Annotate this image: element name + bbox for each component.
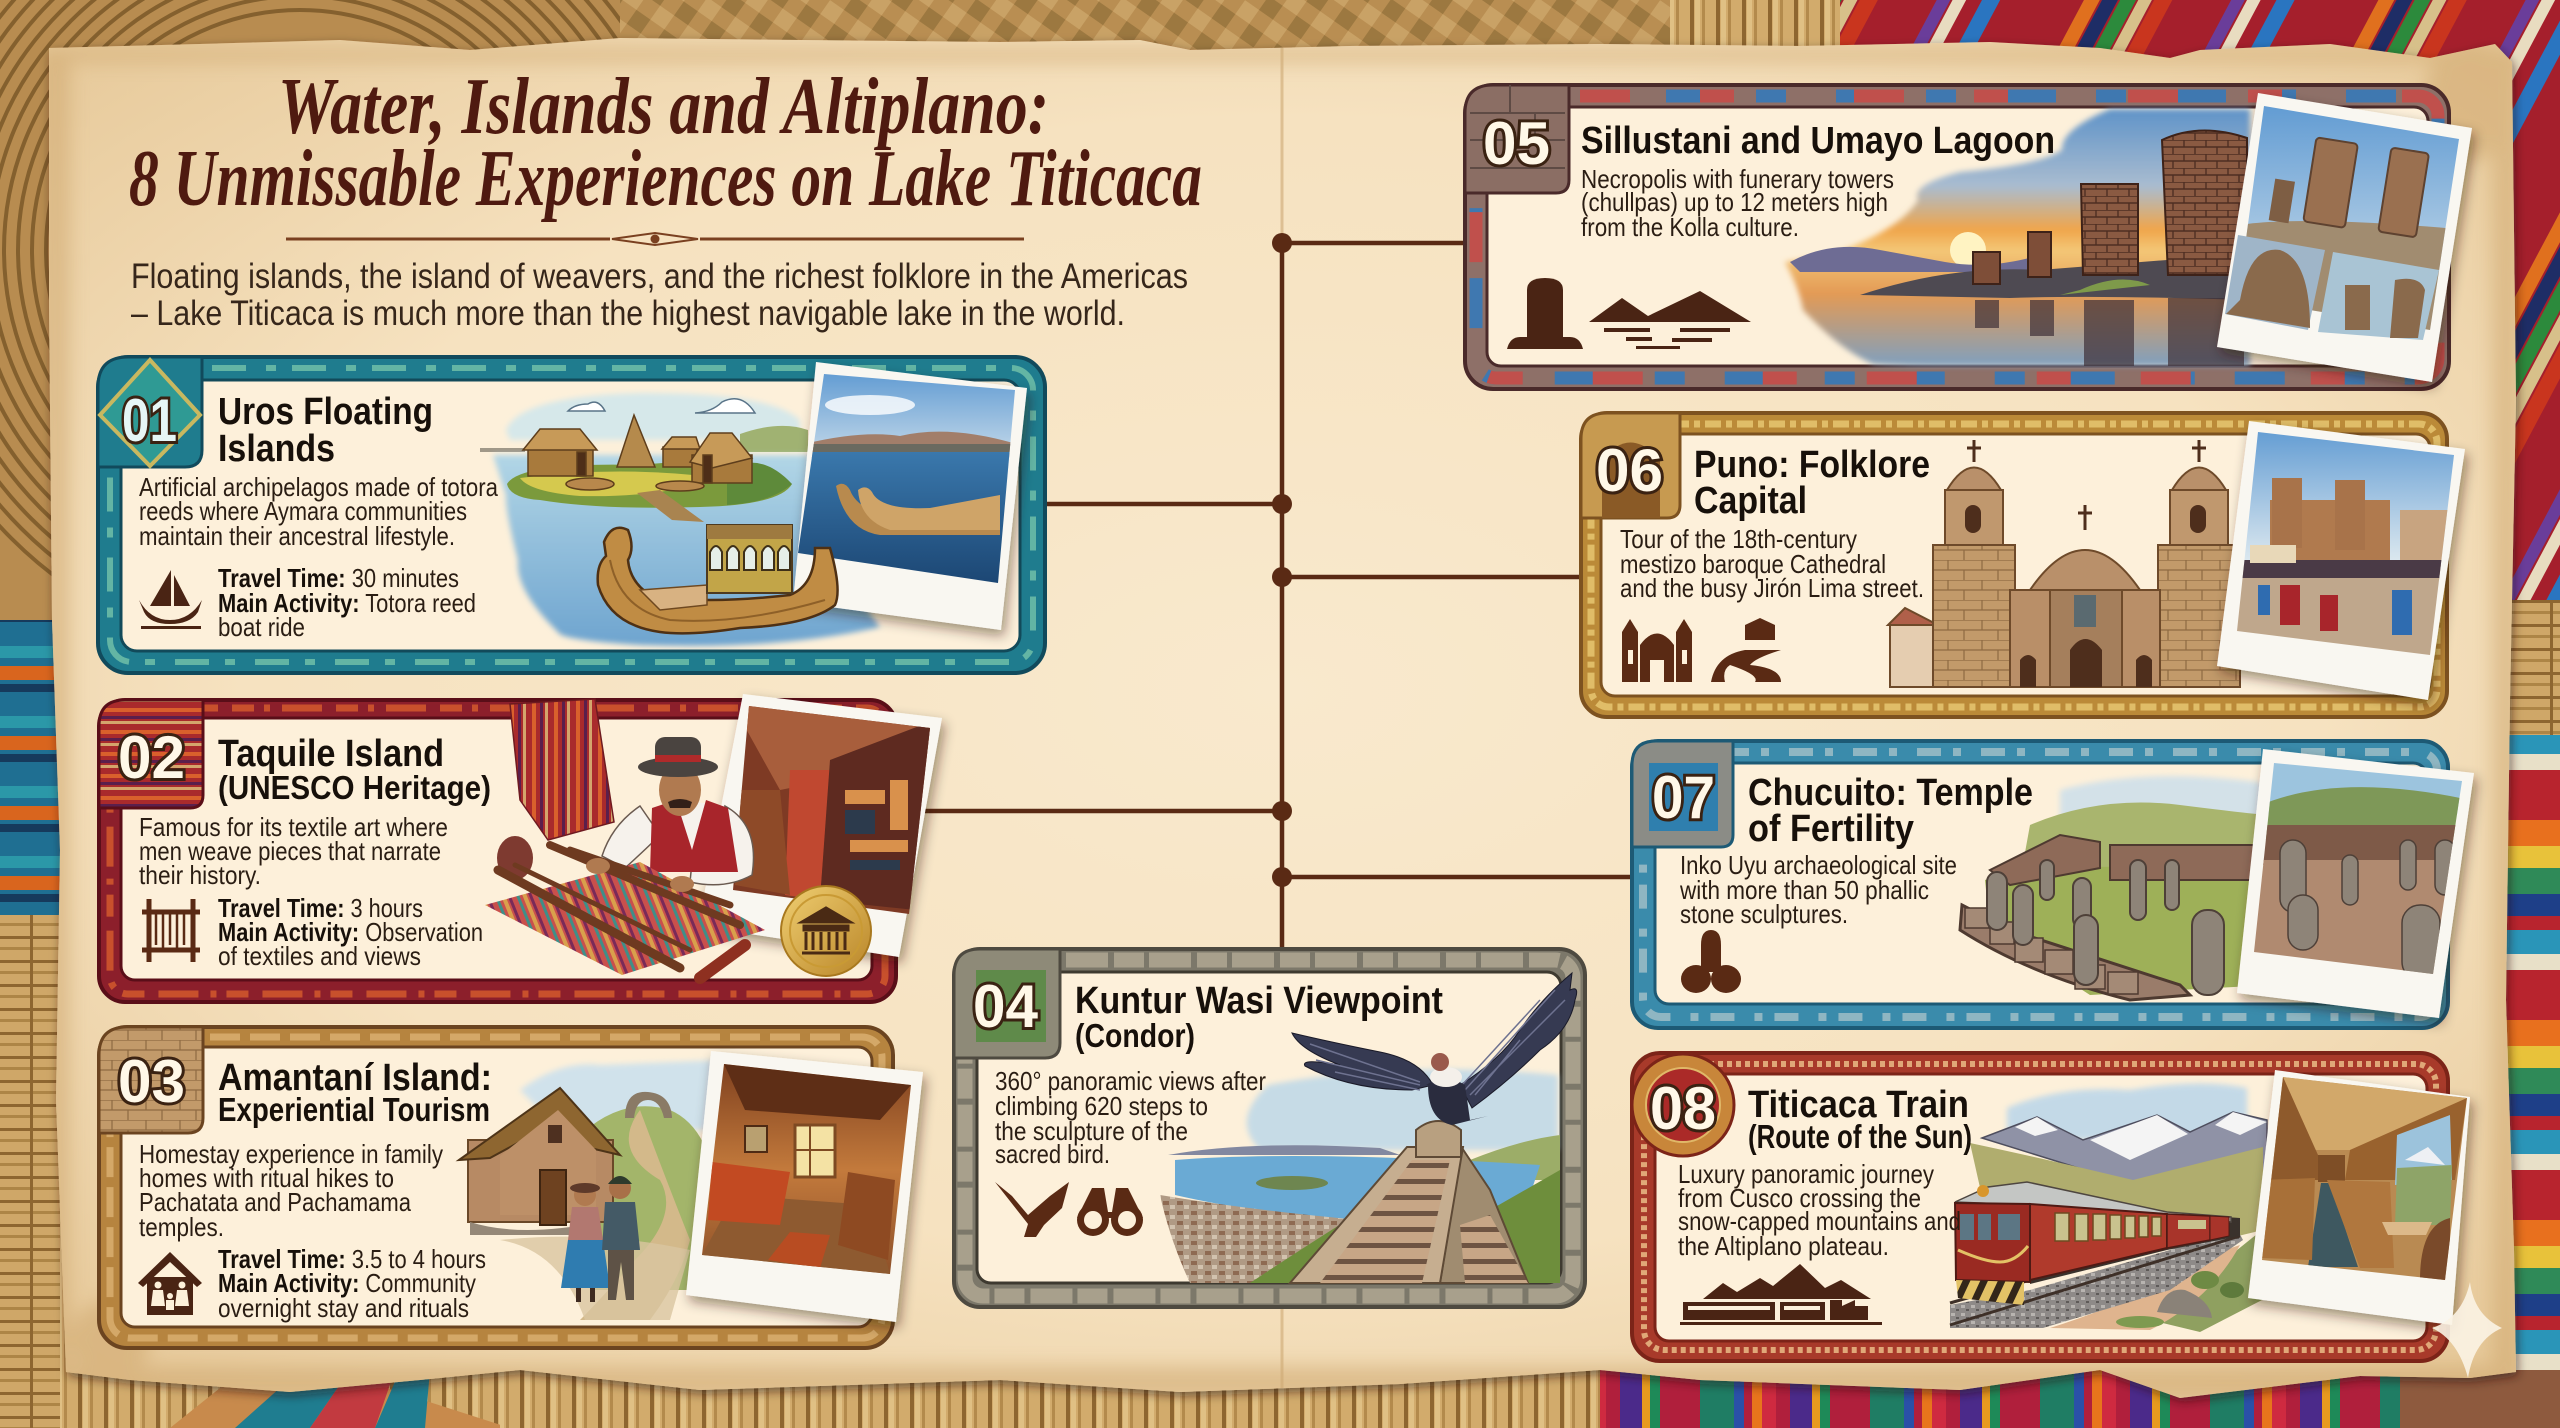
description 06: Tour of the 18th-century — [1620, 524, 1857, 554]
description 07 — [1679, 850, 1957, 929]
photo: standing stones — [2237, 749, 2474, 1018]
heading 02: (UNESCO Heritage) — [218, 769, 491, 806]
description 08 — [1678, 1159, 1961, 1261]
panel: 05 Sillustani and Umayo Lagoon — [1465, 85, 2472, 389]
heading 08: Titicaca Train — [1748, 1084, 1969, 1126]
illustration: Puno cathedral — [1888, 440, 2240, 687]
description 04: the sculpture of the — [995, 1116, 1188, 1146]
icon: winding street — [1711, 618, 1781, 682]
title — [129, 63, 1202, 223]
subtitle: – Lake Titicaca is much more than the highest navigable lake in the world. — [131, 294, 1125, 333]
description 05: (chullpas) up to 12 meters high — [1581, 187, 1888, 217]
heading 03 — [218, 1057, 492, 1128]
connector lines — [896, 233, 1636, 950]
facts 01: boat ride — [218, 612, 305, 642]
heading 04: Kuntur Wasi Viewpoint — [1075, 980, 1443, 1022]
subtitle — [131, 257, 1188, 333]
badge 06 — [1581, 413, 1680, 518]
title divider ornament — [286, 233, 1024, 245]
badge 01 — [98, 357, 202, 467]
heading 05: Sillustani and Umayo Lagoon — [1581, 120, 2055, 162]
badge 05 — [1465, 85, 1569, 193]
heading 04 — [1075, 980, 1443, 1054]
photo: folklore parade in plaza — [2217, 421, 2470, 700]
icon: eagle — [995, 1182, 1069, 1237]
illustration: totora reed boat — [598, 525, 838, 633]
heading 01 — [218, 391, 433, 470]
badge 07 — [1632, 741, 1733, 847]
icon: loom — [142, 899, 200, 962]
icon: train and mountains — [1680, 1264, 1882, 1325]
icon: mountains and water — [1589, 291, 1751, 349]
heading 06 — [1694, 444, 1930, 522]
badge 04 — [954, 949, 1060, 1058]
badge 04: 04 — [973, 973, 1039, 1040]
facts 03: overnight stay and rituals — [218, 1293, 469, 1323]
sparkle mark — [2432, 1282, 2502, 1378]
description 03: homes with ritual hikes to — [139, 1163, 394, 1193]
facts 01: Main Activity: Totora reed — [218, 588, 476, 618]
panel: 08 Titicaca Train — [1632, 1053, 2475, 1361]
heading 06: Capital — [1694, 480, 1807, 522]
icon: carved stone — [1681, 930, 1741, 993]
description 08: from Cusco crossing the — [1678, 1183, 1921, 1213]
illustration: lake view, stairs and condor — [1160, 973, 1577, 1283]
description 08: snow-capped mountains and — [1678, 1206, 1961, 1236]
description 04: 360° panoramic views after — [995, 1066, 1266, 1096]
photo: chullpas collage — [2217, 93, 2472, 382]
badge 08: 08 — [1650, 1075, 1716, 1142]
description 06 — [1620, 524, 1924, 603]
description 04 — [995, 1066, 1266, 1169]
title: Water, Islands and Altiplano: — [278, 63, 1049, 151]
facts 03: Main Activity: Community — [218, 1268, 476, 1298]
icon: binoculars — [1077, 1188, 1143, 1236]
icon: UNESCO medal — [781, 886, 871, 976]
illustration: chullpas at sunset — [1785, 109, 2250, 366]
heading 08: (Route of the Sun) — [1748, 1118, 1972, 1155]
heading 03: Amantaní Island: — [218, 1057, 492, 1099]
description 02 — [139, 812, 448, 890]
badge 01: 01 — [122, 387, 177, 454]
icon: cathedral — [1622, 619, 1692, 682]
badge 03: 03 — [118, 1048, 185, 1115]
illustration: weaver at loom — [485, 699, 765, 978]
badge 07: 07 — [1652, 764, 1715, 831]
description 05: from the Kolla culture. — [1581, 212, 1799, 242]
description 04: climbing 620 steps to — [995, 1091, 1208, 1121]
heading 02: Taquile Island — [218, 733, 444, 775]
panel: 06 Puno Folklore Capital — [1581, 413, 2470, 717]
heading 03: Experiential Tourism — [218, 1091, 490, 1128]
facts 02 — [218, 893, 483, 971]
facts 03: Travel Time: 3.5 to 4 hours — [218, 1244, 486, 1274]
panel: 03 Amantani Island — [99, 1027, 923, 1348]
description 03: Pachatata and Pachamama — [139, 1187, 411, 1217]
illustration: adobe house, hill and couple — [459, 1060, 720, 1320]
facts 03 — [218, 1244, 486, 1323]
description 02: Famous for its textile art where — [139, 812, 448, 842]
heading 01: Uros Floating — [218, 391, 433, 433]
description 03: Homestay experience in family — [139, 1139, 443, 1169]
description 03 — [139, 1139, 443, 1242]
heading 04: (Condor) — [1075, 1017, 1195, 1054]
heading 06: Puno: Folklore — [1694, 444, 1930, 486]
facts 01 — [218, 563, 476, 642]
description 01: Artificial archipelagos made of totora — [139, 472, 498, 502]
panel: 07 Chucuito Temple of Fertility — [1632, 741, 2474, 1028]
description 07: with more than 50 phallic — [1679, 875, 1929, 905]
facts 02: of textiles and views — [218, 941, 421, 971]
icon: family home — [138, 1252, 202, 1315]
description 03: temples. — [139, 1212, 224, 1242]
title: 8 Unmissable Experiences on Lake Titicaca — [129, 135, 1202, 223]
icon: funerary tower — [1507, 278, 1583, 349]
panel: 02 Taquile Island — [99, 694, 942, 1002]
badge 05: 05 — [1483, 110, 1550, 177]
badge 02 — [99, 700, 203, 808]
subtitle: Floating islands, the island of weavers, and the richest folklore in the Americas — [131, 257, 1188, 296]
photo: homestay room — [686, 1051, 923, 1322]
facts 01: Travel Time: 30 minutes — [218, 563, 459, 593]
description 07: Inko Uyu archaeological site — [1680, 850, 1957, 880]
description 01: maintain their ancestral lifestyle. — [139, 521, 455, 551]
description 07: stone sculptures. — [1680, 899, 1848, 929]
description 05: Necropolis with funerary towers — [1581, 164, 1894, 194]
illustration: train through the Andes — [1950, 1083, 2267, 1332]
badge 06: 06 — [1596, 437, 1663, 504]
photo: train interior — [2248, 1070, 2475, 1325]
facts 02: Main Activity: Observation — [218, 917, 483, 947]
badge 03 — [99, 1027, 203, 1133]
description 04: sacred bird. — [995, 1139, 1110, 1169]
description 01: reeds where Aymara communities — [139, 496, 467, 526]
badge 08 — [1632, 1054, 1734, 1156]
description 02: men weave pieces that narrate — [139, 836, 441, 866]
heading 01: Islands — [218, 428, 335, 470]
illustration: floating island — [480, 393, 880, 646]
heading 02 — [218, 733, 491, 806]
description 08: Luxury panoramic journey — [1678, 1159, 1934, 1189]
badge 02: 02 — [118, 724, 185, 791]
description 08: the Altiplano plateau. — [1678, 1231, 1889, 1261]
illustration: Inko Uyu stone site — [1960, 776, 2280, 1000]
heading 07: Chucuito: Temple — [1748, 772, 2033, 814]
photo: textiles — [698, 694, 942, 957]
description 06: mestizo baroque Cathedral — [1620, 549, 1886, 579]
description 01 — [139, 472, 498, 551]
description 06: and the busy Jirón Lima street. — [1620, 573, 1924, 603]
photo: reed boat on the lake — [790, 362, 1030, 630]
panel: 01 Uros Floating Islands — [98, 357, 1045, 673]
description 05 — [1581, 164, 1894, 242]
facts 02: Travel Time: 3 hours — [218, 893, 423, 923]
icon: reed boat — [139, 570, 202, 629]
panel: 04 Kuntur Wasi Viewpoint — [954, 949, 1585, 1307]
heading 07: of Fertility — [1748, 808, 1914, 850]
heading 08 — [1748, 1084, 1972, 1155]
description 02: their history. — [139, 860, 261, 890]
heading 07 — [1748, 772, 2033, 850]
